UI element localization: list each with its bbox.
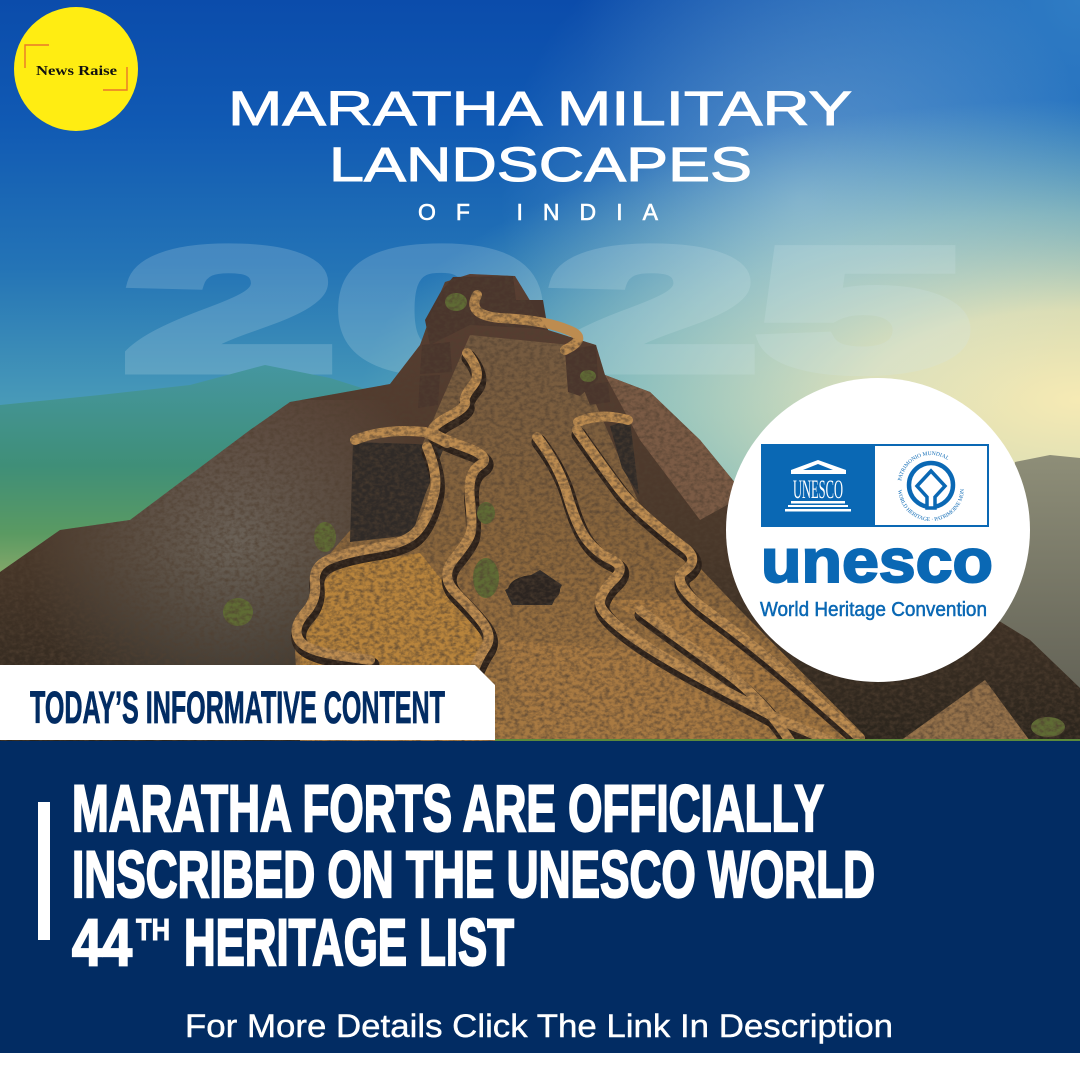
title — [228, 83, 852, 225]
title: LANDSCAPES — [329, 139, 752, 192]
icon: temple: UNESCO — [793, 475, 843, 504]
convention label: World Heritage Convention — [760, 599, 987, 621]
fort summit walls — [418, 276, 610, 408]
emblem box — [761, 444, 989, 527]
title: MARATHA MILITARY — [228, 83, 852, 136]
distant hills — [0, 365, 1080, 741]
tag: today's informative content: TODAY’S INFORMATIVE CONTENT — [30, 682, 445, 733]
headline — [72, 771, 875, 979]
accent bar — [38, 802, 50, 940]
horizon line — [495, 739, 1080, 741]
news raise logo — [14, 7, 138, 131]
icon: temple — [785, 460, 851, 512]
winding wall shadows — [299, 358, 862, 746]
headline: HERITAGE LIST — [184, 905, 514, 979]
headline: TH — [136, 912, 170, 947]
unesco badge — [726, 378, 1030, 682]
icon: world heritage emblem — [898, 451, 964, 521]
title: OF INDIA — [418, 199, 659, 225]
headline: 44 — [72, 905, 132, 979]
ghost year 2025: 2025 — [124, 214, 969, 406]
rock outcrop — [508, 575, 560, 605]
icon: world heritage emblem: WORLD HERITAGE · PATRIMOINE MONDIAL — [898, 488, 964, 521]
navy panel — [0, 741, 1080, 1053]
rock texture — [0, 274, 1080, 741]
background sky — [0, 0, 1080, 745]
icon: world heritage emblem: PATRIMONIO MUNDIAL — [898, 451, 948, 481]
winding golden walls — [297, 295, 860, 741]
news raise logo: News Raise — [36, 63, 117, 78]
footer call to action: For More Details Click The Link In Description — [185, 1008, 893, 1044]
photo: hill fort landscape — [0, 274, 1080, 741]
unesco wordmark: unesco — [761, 527, 993, 595]
tag: today's informative content — [0, 665, 495, 740]
mountain body — [0, 274, 1080, 741]
sunlit ground — [295, 335, 870, 741]
dark bastion faces — [350, 420, 639, 605]
shrubs — [223, 293, 1065, 737]
